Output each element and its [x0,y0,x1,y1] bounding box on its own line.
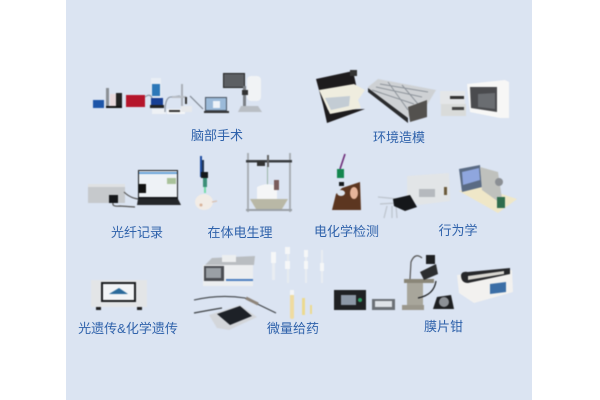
group: behavior [438,165,517,238]
group: optogenetics and chemogenetics [78,280,178,336]
group: microinjection [194,247,324,336]
label: fiber photometry: 光纤记录 [111,225,163,240]
icon: electrochemical workstation [378,173,450,218]
label: optogenetics and chemogenetics: 光遗传&化学遗传 [78,321,178,336]
label: brain surgery: 脑部手术 [191,128,243,143]
label: environment modeling: 环境造模 [373,130,425,145]
label: microinjection: 微量给药 [267,321,319,336]
icon: recording headstage and mouse [195,156,217,210]
icon: small controller [372,299,395,310]
group: in vivo electrophysiology [195,153,292,240]
label: behavior: 行为学 [438,223,478,238]
label: patch clamp: 膜片钳 [424,319,463,334]
icon: syringe pump [203,255,255,286]
icon: injector and tablet [194,296,276,330]
icon: motorized device [457,268,513,303]
icon: syringes and vials [271,247,324,319]
icon: environment modeling equipment [316,70,509,123]
icon: amplifier [334,290,366,310]
icon: stereotaxic frame [246,153,292,212]
icon: brain surgery equipment [93,73,262,114]
group: patch clamp [334,255,513,334]
group: electrochemical detection [314,154,450,239]
icon: peristaltic pump [433,295,454,309]
icon: probe and rat [332,154,361,210]
group: environment modeling [316,70,509,145]
group: brain surgery [93,73,262,143]
icon: touchscreen controller [91,280,147,310]
label: in vivo electrophysiology: 在体电生理 [207,225,273,240]
icon: behavior apparatus [459,165,517,213]
icon: photometry box and laptop [88,170,181,207]
label: electrochemical detection: 电化学检测 [314,224,379,239]
icon: patch clamp stand [402,255,438,310]
group: fiber photometry [88,170,181,240]
